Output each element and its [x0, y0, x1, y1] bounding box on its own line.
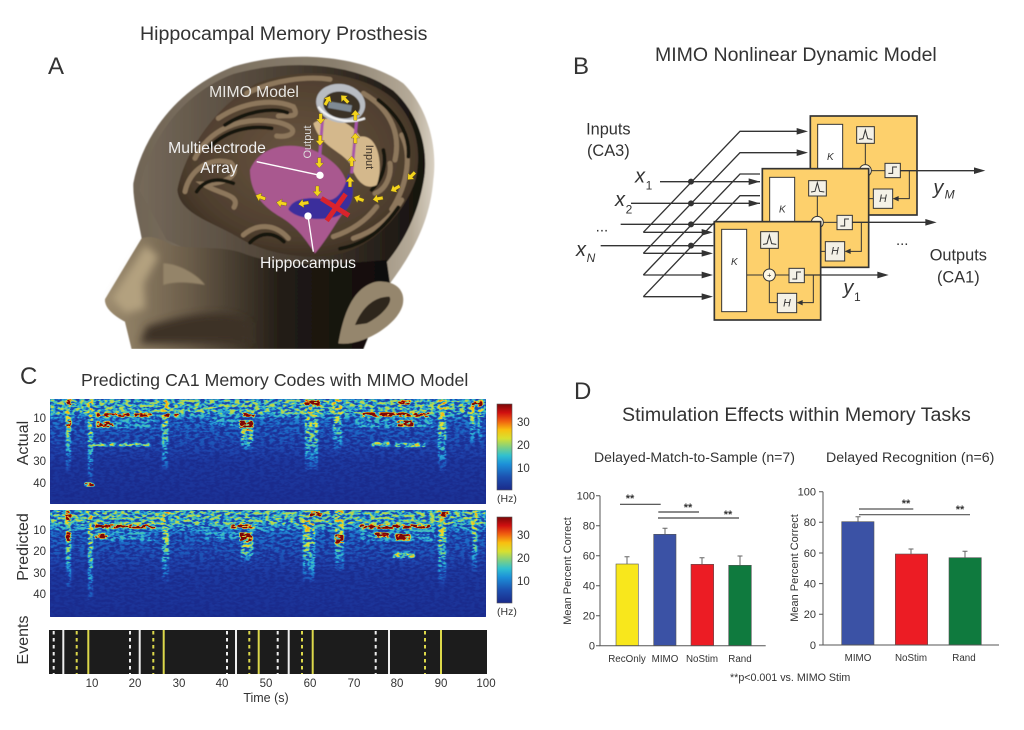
heatmap row labels: 20 [33, 433, 46, 445]
icon: brain folds [185, 78, 407, 238]
label: x2: 2 [626, 202, 633, 216]
y tick labels [798, 486, 816, 652]
axis label: Actual: Actual [15, 421, 32, 465]
y tick labels: 40 [804, 578, 816, 590]
colorbar: predicted tick labels: 20 [517, 553, 530, 565]
time axis title: Time (s) [243, 691, 289, 705]
icon: dark brain sulci [197, 100, 409, 249]
diagram: block M: H [879, 193, 887, 205]
time axis labels: 80 [391, 678, 403, 690]
icon: nose highlight [112, 245, 158, 313]
time axis labels: 60 [304, 678, 316, 690]
icon: brow and eye area [163, 263, 205, 285]
time axis labels [86, 678, 496, 690]
x category labels: MIMO [845, 653, 872, 664]
colorbar: predicted [497, 517, 512, 603]
bar chart: delayed match to sample [562, 490, 766, 665]
subtitle: delayed recognition: Delayed Recognition (n=6) [826, 450, 994, 466]
x category labels: Rand [952, 653, 976, 664]
x category labels: MIMO [652, 654, 679, 665]
bar chart: delayed recognition [789, 486, 999, 664]
label: Inputs (CA3) [586, 120, 631, 160]
label: output ellipsis: ... [896, 232, 908, 249]
label: Outputs (CA1): Outputs [930, 247, 987, 265]
y tick labels: 100 [577, 490, 595, 502]
diagram: block front: K [731, 257, 739, 268]
time axis labels: 30 [173, 678, 185, 690]
label: Input: Input [363, 145, 375, 169]
time axis labels: 50 [260, 678, 272, 690]
diagram: input wires rear [643, 131, 803, 297]
label: yM: y [931, 177, 944, 199]
icon: output and input tracts [318, 118, 357, 173]
bars [842, 522, 981, 645]
time axis labels: 10 [86, 678, 98, 690]
heatmap: predicted [50, 510, 486, 617]
yellow solid event lines [88, 630, 441, 674]
diagram: input arrowheads and junctions [688, 178, 760, 300]
x category labels [845, 653, 976, 664]
label: Outputs (CA1): (CA1) [937, 268, 980, 286]
label: Hippocampus: Hippocampus [260, 255, 356, 272]
icon: head base painting [105, 57, 434, 349]
error bars [624, 528, 742, 565]
colorbar: predicted tick labels [497, 530, 530, 618]
colorbar: actual tick labels: (Hz) [497, 493, 517, 505]
icon: tan cortical area [313, 119, 380, 187]
time axis labels: 90 [435, 678, 447, 690]
colorbar: actual [497, 404, 512, 490]
label: Multielectrode Array [168, 140, 266, 177]
label: Output: Output [302, 125, 314, 159]
panel label B: B [573, 53, 589, 80]
colorbar: actual tick labels [497, 417, 530, 505]
time axis labels: 40 [216, 678, 228, 690]
y tick labels: 60 [804, 548, 816, 560]
heatmap row labels: 10 [33, 525, 46, 537]
label: input ellipsis: ... [596, 219, 608, 236]
icon: red X blocked path [321, 194, 349, 221]
panel B title: MIMO Nonlinear Dynamic Model [655, 44, 937, 66]
footnote: **p<0.001 vs. MIMO Stim [730, 672, 850, 684]
heatmap row labels: 30 [33, 568, 46, 580]
subtitle: delayed match to sample: Delayed-Match-to-Sample (n=7) [594, 449, 795, 465]
label: MIMO Model: MIMO Model [209, 84, 299, 101]
heatmap: actual [50, 399, 486, 504]
y tick labels: 80 [583, 520, 595, 532]
icon: ear [338, 281, 403, 344]
heatmap row labels: 40 [33, 478, 46, 490]
icon: brain [177, 73, 418, 257]
y tick labels: 60 [583, 550, 595, 562]
events raster [49, 630, 487, 674]
panel C title: Predicting CA1 Memory Codes with MIMO Model [81, 370, 468, 390]
label: x1: 1 [646, 178, 653, 192]
x category labels [608, 654, 752, 665]
time axis labels: 70 [348, 678, 360, 690]
y tick labels: 0 [810, 640, 816, 652]
x category labels: RecOnly [608, 654, 646, 665]
panel label C: C [20, 363, 37, 390]
axis label: Events: Events [15, 616, 32, 664]
label: yM: M [945, 188, 955, 202]
colorbar: actual tick labels: 10 [517, 463, 530, 475]
heatmap row labels: 20 [33, 546, 46, 558]
label: yM [931, 177, 955, 202]
axis label: Predicted: Predicted [15, 513, 32, 581]
significance brackets [859, 509, 970, 515]
icon: face and neck [105, 237, 390, 349]
diagram: input wires [601, 182, 760, 297]
error bars [856, 517, 968, 558]
label: x2 [614, 189, 633, 216]
icon: inner ear [355, 297, 390, 325]
colorbar: actual tick labels: 30 [517, 417, 530, 429]
yellow dashed event lines [77, 631, 425, 674]
icon: yellow signal arrows [254, 92, 418, 209]
heatmap row labels: 30 [33, 456, 46, 468]
x category labels: NoStim [686, 654, 718, 665]
axes [819, 492, 999, 645]
colorbar: actual tick labels: 20 [517, 440, 530, 452]
time axis labels: 20 [129, 678, 141, 690]
label: y1: 1 [854, 290, 861, 304]
label: y1 [841, 277, 861, 304]
diagram: block middle: K [779, 205, 787, 216]
head callout labels [168, 84, 375, 272]
y tick labels: 100 [798, 486, 816, 498]
label: xN: x [575, 239, 587, 261]
significance stars: ** [724, 509, 733, 521]
label: Inputs (CA3): Inputs [586, 120, 631, 138]
panel A title: Hippocampal Memory Prosthesis [140, 23, 428, 45]
diagram: output y_M [900, 167, 985, 174]
x category labels: Rand [728, 654, 752, 665]
y tick labels: 20 [804, 609, 816, 621]
colorbar: predicted tick labels: 10 [517, 576, 530, 588]
icon: pink limbic region [250, 146, 348, 253]
label: xN: N [587, 251, 596, 265]
panel B: MIMO block diagram [575, 116, 987, 320]
diagram: block middle: H [831, 246, 839, 258]
diagram: block M [810, 116, 917, 215]
diagram: block front [714, 222, 821, 320]
diagram: block front: H [783, 298, 791, 310]
axes [596, 496, 766, 646]
diagram: rear input arrowheads [797, 128, 808, 156]
icon: translucent head shell [105, 57, 434, 349]
significance stars [626, 493, 733, 521]
time axis labels: 100 [476, 678, 496, 690]
y tick labels: 20 [583, 610, 595, 622]
significance stars: ** [956, 504, 965, 516]
significance brackets [620, 504, 739, 518]
x category labels: NoStim [895, 653, 927, 664]
panel label A: A [48, 53, 64, 80]
diagram: block front: + [767, 271, 771, 280]
icon: inner skull [166, 64, 426, 266]
y tick labels: 0 [589, 640, 595, 652]
label: x2: x [614, 189, 626, 211]
heatmap row labels: 40 [33, 589, 46, 601]
white solid event lines [63, 630, 389, 674]
y tick labels [577, 490, 595, 652]
y tick labels: 40 [583, 580, 595, 592]
y axis title: Mean Percent Correct [562, 517, 574, 625]
icon: lower jaw shading [140, 313, 250, 343]
diagram: block M: K [827, 152, 835, 163]
significance stars: ** [684, 502, 693, 514]
panel D title: Stimulation Effects within Memory Tasks [622, 404, 971, 426]
white dashed event lines [54, 631, 376, 674]
label: xN [575, 239, 596, 265]
label: x1: x [634, 165, 646, 187]
diagram: block middle [762, 169, 869, 267]
y tick labels: 80 [804, 517, 816, 529]
label: Multielectrode Array: Multielectrode [168, 140, 266, 157]
label: Inputs (CA3): (CA3) [587, 142, 630, 160]
heatmap row labels [33, 413, 46, 601]
label: Multielectrode Array: Array [200, 160, 238, 177]
heatmap row labels: 10 [33, 413, 46, 425]
significance stars: ** [626, 493, 635, 505]
icon: prosthesis ring [315, 83, 366, 124]
icon: hippocampus [288, 173, 353, 219]
significance stars [902, 498, 965, 516]
diagram: output middle [852, 219, 937, 226]
label: y1: y [841, 277, 854, 299]
significance stars: ** [902, 498, 911, 510]
icon: leader lines and electrode dots [257, 162, 324, 252]
panel A: head illustration [105, 57, 434, 349]
colorbar: predicted tick labels: 30 [517, 530, 530, 542]
panel label D: D [574, 378, 591, 405]
diagram: output y_1 [804, 272, 889, 278]
colorbar: predicted tick labels: (Hz) [497, 606, 517, 618]
label: Outputs (CA1) [930, 247, 987, 286]
label: x1 [634, 165, 653, 192]
bars [616, 534, 751, 646]
y axis title: Mean Percent Correct [789, 514, 801, 622]
